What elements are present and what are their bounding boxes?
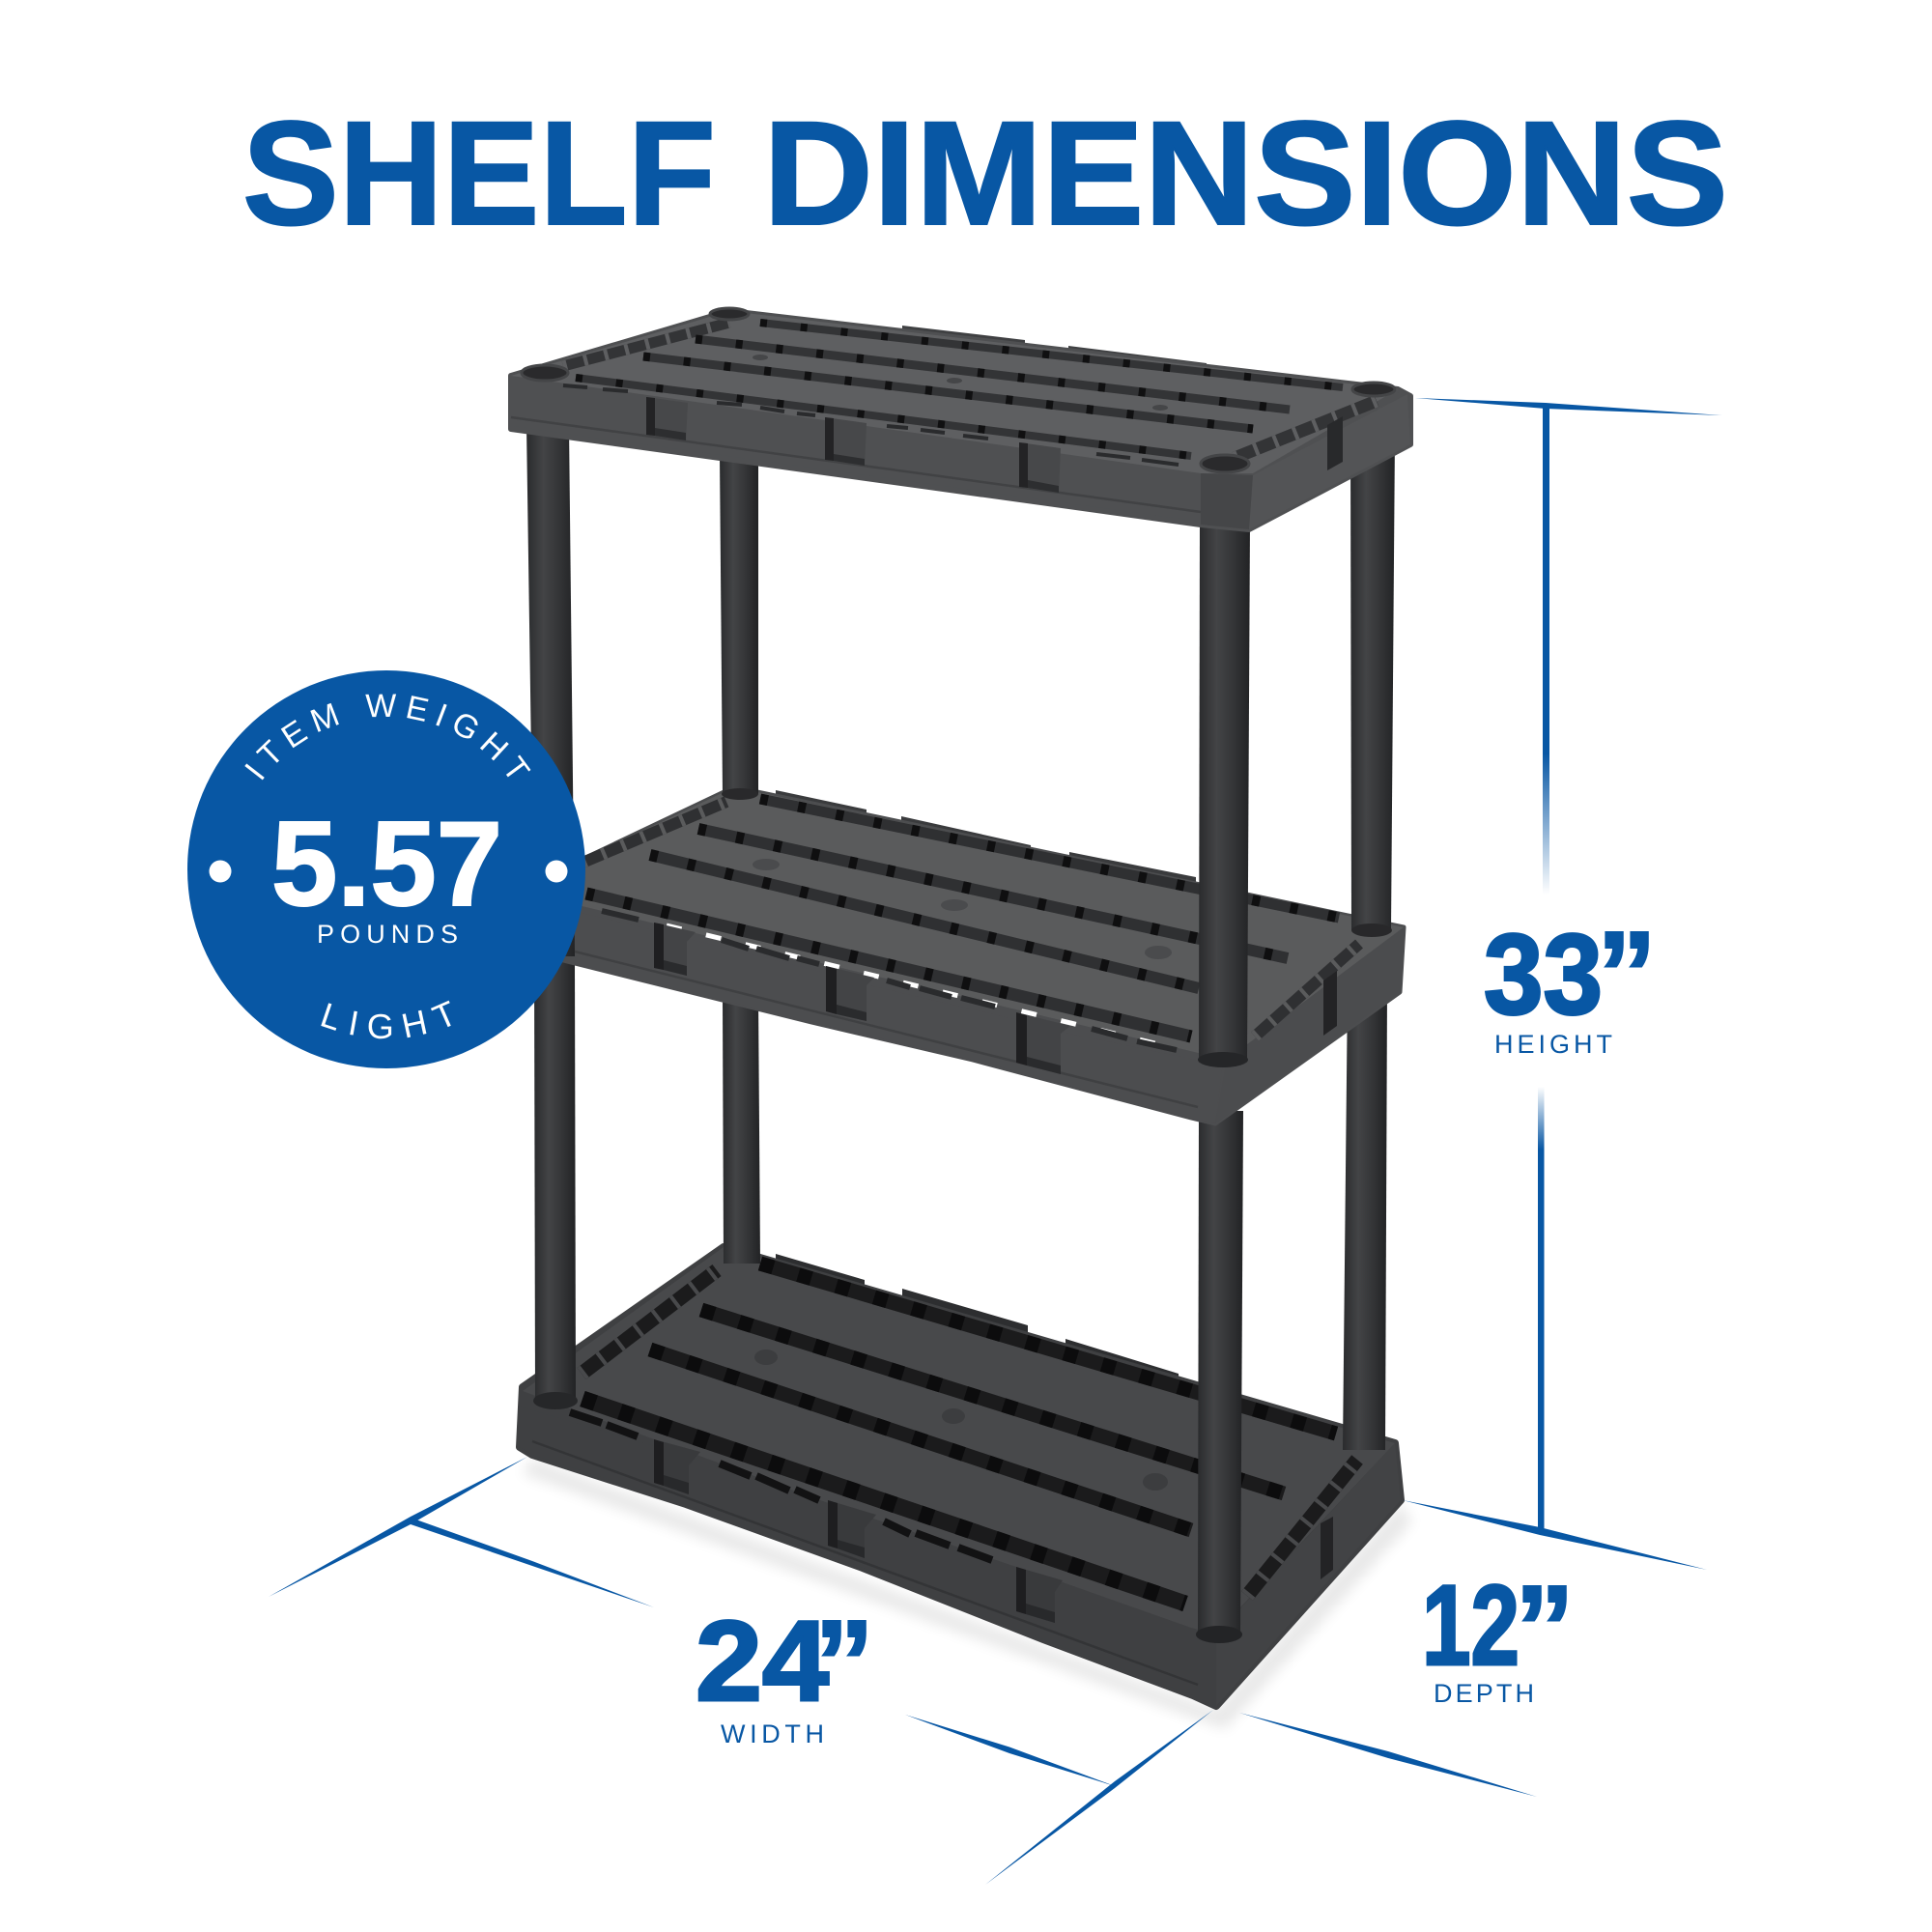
item weight badge xyxy=(187,670,585,1068)
width dimension lines xyxy=(269,1457,1213,1885)
badge arc footer: LIGHT xyxy=(321,1001,451,1039)
middle shelf xyxy=(517,787,1404,1123)
middle shelf silhouette xyxy=(517,787,1404,1123)
depth dimension line xyxy=(1239,1500,1707,1797)
depth value: 12 xyxy=(1422,1562,1520,1690)
height dimension line xyxy=(1415,398,1722,1530)
height label: HEIGHT xyxy=(1494,1030,1612,1059)
height value xyxy=(1484,906,1657,1042)
title: DIMENSIONS xyxy=(763,91,1728,256)
top shelf notches xyxy=(646,397,1343,493)
title: SHELF xyxy=(242,91,716,256)
shelf unit product image xyxy=(511,308,1412,1729)
depth label: DEPTH xyxy=(1434,1679,1534,1708)
badge circle xyxy=(187,670,585,1068)
height value: 33 xyxy=(1484,911,1603,1038)
width value: ” xyxy=(814,1595,874,1731)
middle screws xyxy=(753,859,1172,959)
socket caps xyxy=(522,308,1395,472)
top shelf xyxy=(511,308,1410,529)
width value xyxy=(696,1595,874,1731)
upper posts xyxy=(526,425,1395,1067)
bottom shelf front lip xyxy=(520,1406,1216,1706)
middle shelf front lip xyxy=(517,897,1223,1123)
bottom shelf xyxy=(520,1247,1401,1706)
badge unit: POUNDS xyxy=(317,920,458,949)
bottom screws xyxy=(754,1350,1168,1491)
floor shadow xyxy=(522,1459,1412,1729)
bottom shelf notches xyxy=(654,1439,1333,1623)
width value: 24 xyxy=(696,1598,829,1725)
badge left dot xyxy=(209,860,232,883)
title xyxy=(242,91,1728,256)
top screws xyxy=(753,355,1168,411)
depth value: ” xyxy=(1515,1560,1575,1696)
badge weight value: 5.57 xyxy=(271,798,502,931)
middle shelf notches xyxy=(654,923,1337,1074)
height value: ” xyxy=(1597,906,1657,1042)
see-through gaps in the front row xyxy=(667,925,1171,1047)
width label: WIDTH xyxy=(721,1719,824,1748)
lower posts xyxy=(533,956,1387,1643)
badge arc heading: ITEM WEIGHT xyxy=(244,694,531,781)
badge right dot xyxy=(545,860,568,883)
